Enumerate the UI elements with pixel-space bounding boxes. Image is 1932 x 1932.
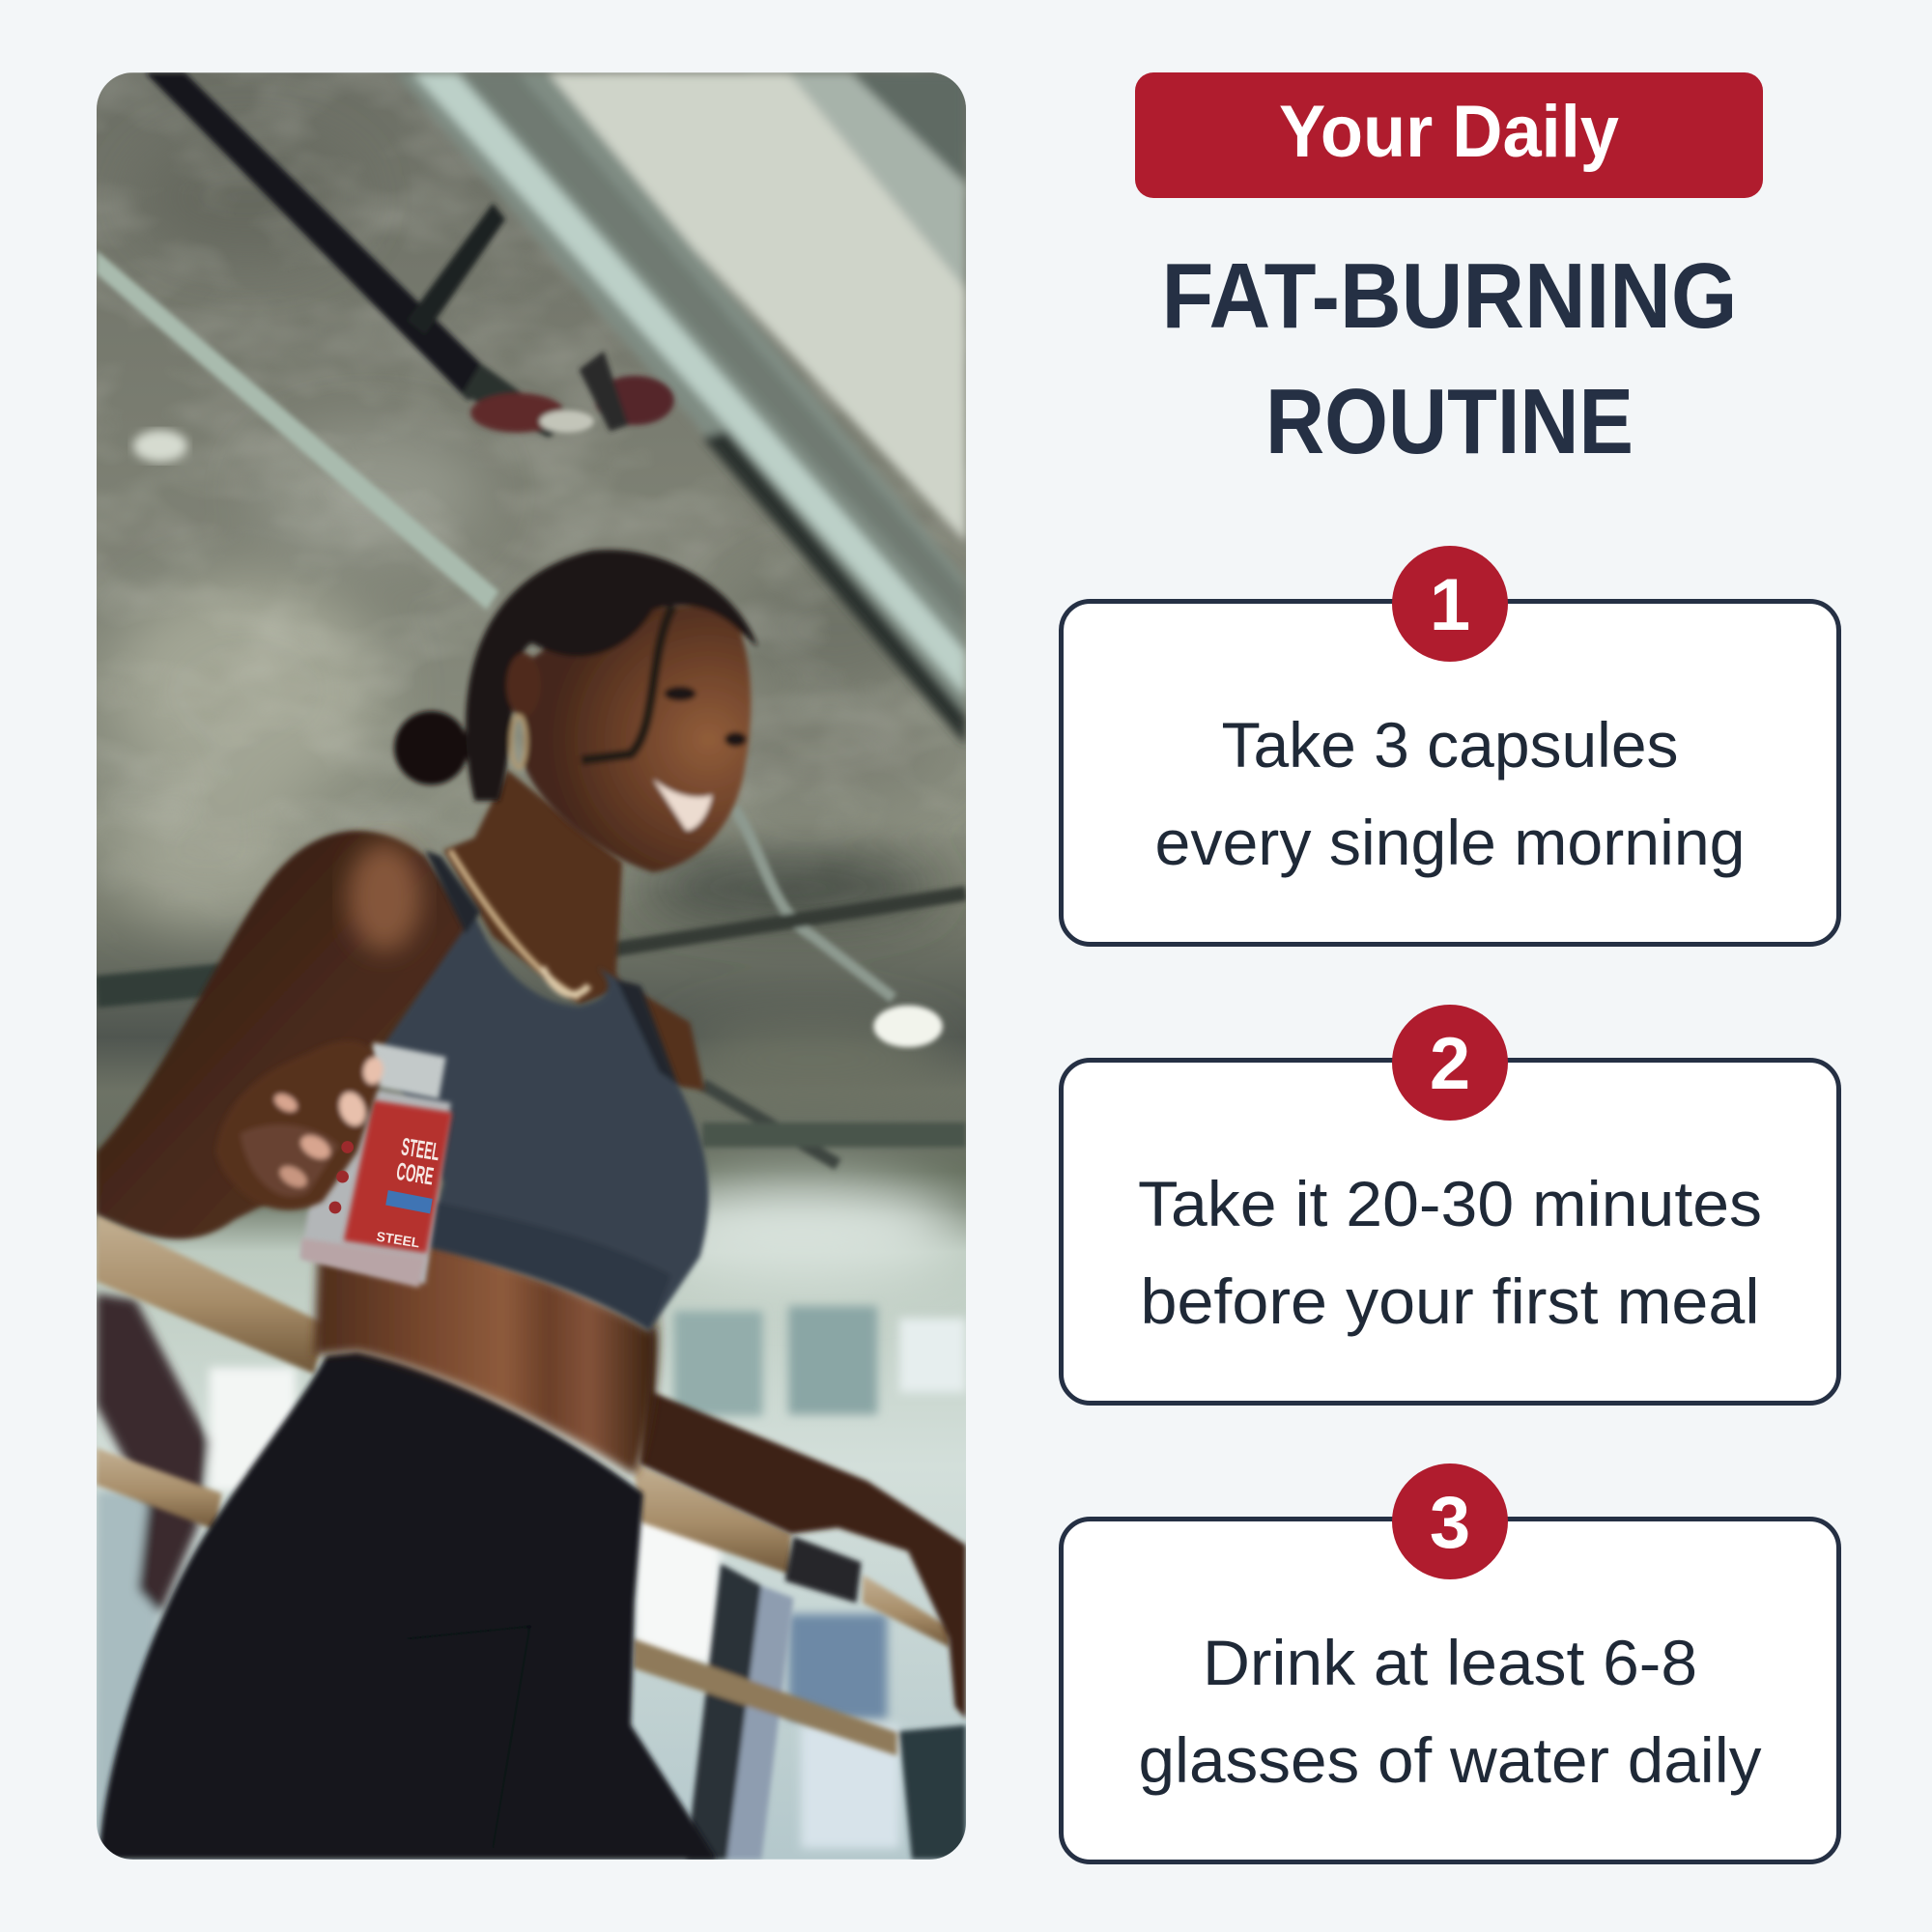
step 1 number badge: 1 xyxy=(1430,564,1470,646)
eyes xyxy=(664,686,696,701)
supplement bottle: STEEL xyxy=(376,1229,421,1251)
step 3 text xyxy=(1138,1627,1762,1796)
step 1 text: every single morning xyxy=(1155,807,1745,878)
ear xyxy=(506,653,541,717)
conduit pipes on right xyxy=(96,807,966,1164)
bottle label xyxy=(344,1100,452,1253)
bottle body xyxy=(300,1082,451,1284)
step card 1 xyxy=(1061,546,1839,945)
photo: woman holding supplement bottle in gym xyxy=(96,72,966,1860)
sports bra xyxy=(382,850,709,1331)
ceiling light left xyxy=(133,430,187,462)
label blue stripe xyxy=(385,1190,433,1213)
bottle cap xyxy=(366,1042,446,1099)
heading: FAT-BURNING ROUTINE: FAT-BURNING xyxy=(1161,244,1737,348)
step 3 text: glasses of water daily xyxy=(1138,1724,1762,1796)
shoulder highlight xyxy=(348,842,421,952)
ceiling and room backdrop xyxy=(96,72,966,1860)
hair bun xyxy=(394,711,469,784)
badge: Your Daily: Your Daily xyxy=(1279,91,1619,173)
heading: FAT-BURNING ROUTINE: ROUTINE xyxy=(1265,370,1634,473)
step 2 text: Take it 20-30 minutes xyxy=(1138,1168,1762,1239)
concrete ceiling mottling xyxy=(111,135,961,1282)
step 3 text: Drink at least 6-8 xyxy=(1203,1627,1697,1698)
leggings xyxy=(99,1351,717,1860)
smile xyxy=(653,779,712,831)
step 3 number badge xyxy=(1392,1463,1508,1579)
lower light pipe xyxy=(96,250,499,610)
bottle pills xyxy=(300,1238,426,1288)
supplement bottle xyxy=(300,1042,452,1288)
hair wisp xyxy=(582,607,672,760)
railing and posts xyxy=(96,1213,966,1860)
heading: FAT-BURNING ROUTINE xyxy=(1161,244,1737,473)
concrete texture xyxy=(97,73,945,875)
step 1 text: Take 3 capsules xyxy=(1221,709,1679,781)
step 3 number badge: 3 xyxy=(1430,1482,1470,1564)
upper arm and shoulder xyxy=(96,831,480,1239)
step 1 number badge xyxy=(1392,546,1508,662)
hand and fingers xyxy=(215,1041,385,1210)
step 2 text: before your first meal xyxy=(1140,1265,1760,1337)
bottle side icons xyxy=(329,1141,354,1213)
ceiling lamp right xyxy=(873,1006,943,1047)
step 2 text xyxy=(1138,1168,1762,1337)
neck and chest xyxy=(443,770,705,1091)
hair xyxy=(466,550,757,801)
step 2 number badge: 2 xyxy=(1430,1023,1470,1105)
face xyxy=(524,607,751,872)
supplement bottle: CORE xyxy=(394,1158,436,1191)
overhead panel and duct xyxy=(394,72,966,746)
earring xyxy=(511,716,526,768)
step card 2 xyxy=(1061,1005,1839,1403)
step 1 text xyxy=(1155,709,1745,878)
badge: Your Daily xyxy=(1135,72,1763,198)
wrist band xyxy=(784,1537,862,1603)
label text: STEEL xyxy=(400,1133,441,1166)
step card 3 xyxy=(1061,1463,1839,1862)
midriff xyxy=(314,1238,658,1475)
step 2 number badge xyxy=(1392,1005,1508,1121)
windows and background structures xyxy=(96,1293,966,1848)
black beams and red fitting xyxy=(146,72,674,438)
far arm and hand xyxy=(639,1306,966,1719)
head xyxy=(394,550,757,872)
necklace xyxy=(450,850,589,998)
